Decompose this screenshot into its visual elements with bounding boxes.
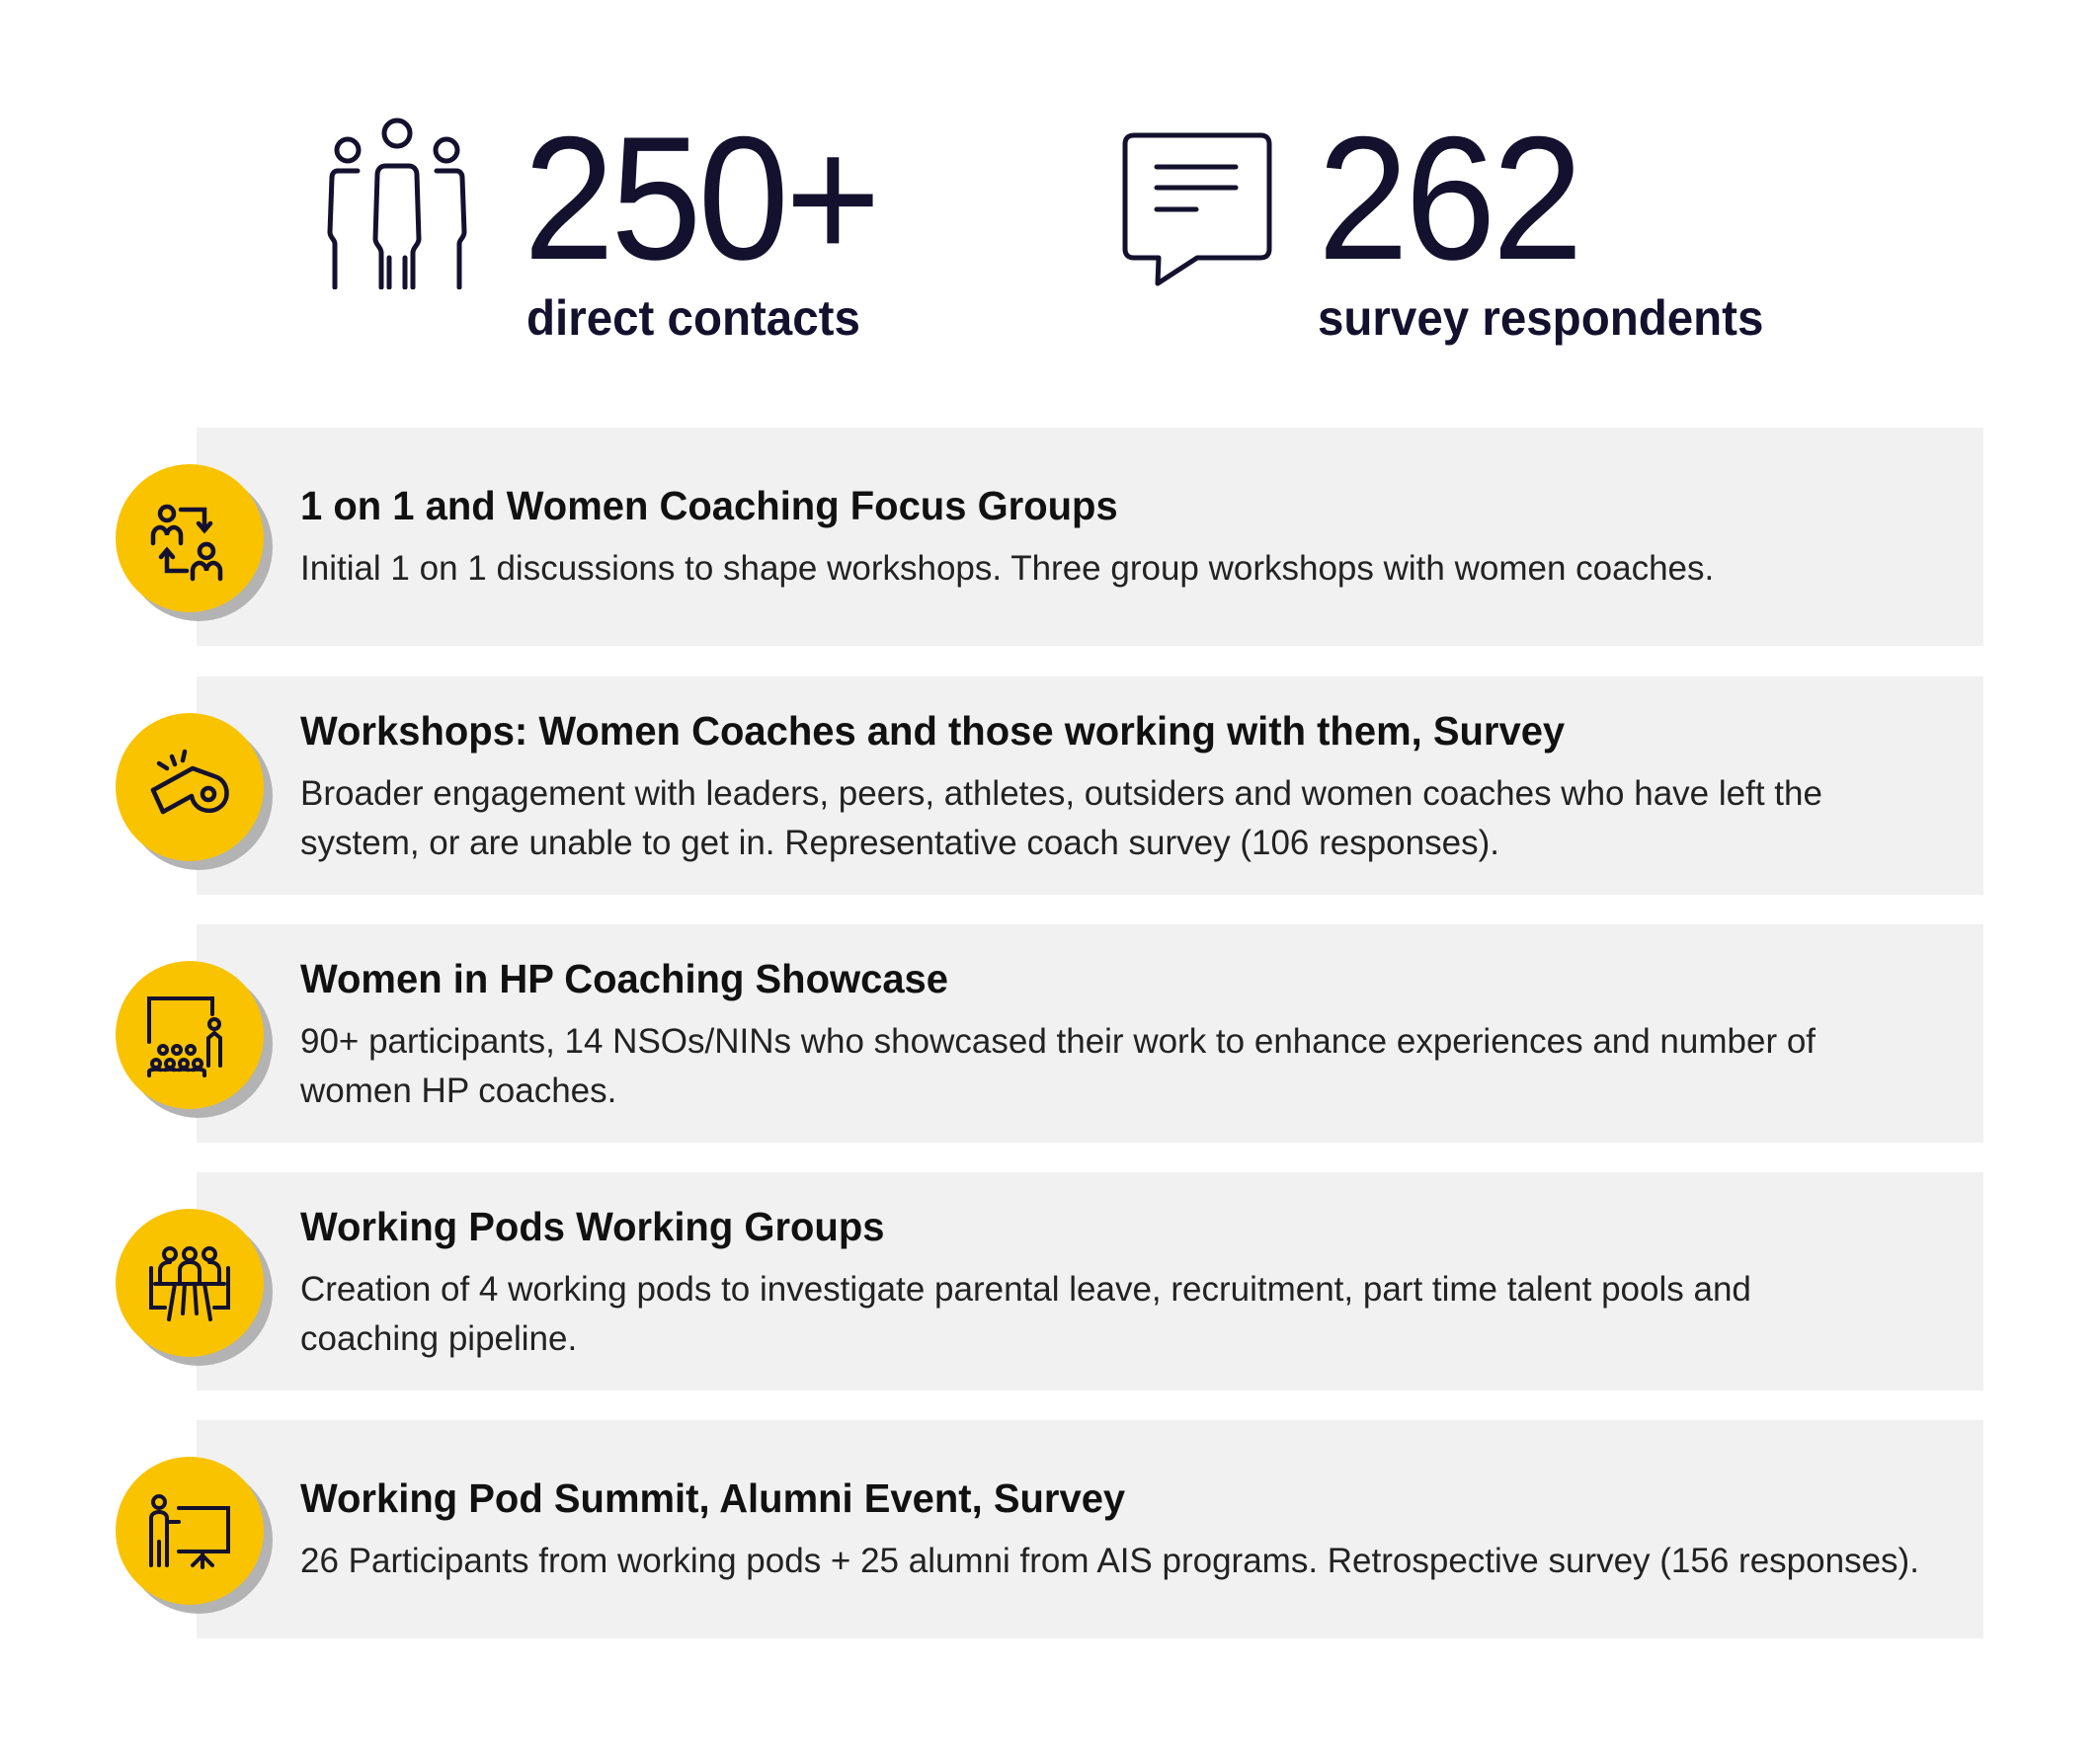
stat: 262: 262 xyxy=(1318,100,1579,296)
stat: 250+: 250+ xyxy=(524,100,877,296)
text xyxy=(300,774,1822,862)
icon: people xyxy=(328,119,466,289)
heading: Working Pods Working Groups xyxy=(300,1204,885,1249)
icon: presentation audience xyxy=(116,961,273,1118)
panel: workshops xyxy=(197,676,1983,895)
heading: Women in HP Coaching Showcase xyxy=(300,956,948,1001)
text: coaching pipeline. xyxy=(300,1319,577,1358)
heading: Working Pod Summit, Alumni Event, Survey xyxy=(300,1475,1125,1521)
panel: showcase xyxy=(197,924,1983,1143)
text: 90+ participants, 14 NSOs/NINs who showcased their work to enhance experiences and number of xyxy=(300,1022,1816,1061)
text xyxy=(300,1270,1751,1358)
icon: 1 on 1 exchange xyxy=(116,464,273,621)
heading: Workshops: Women Coaches and those working with them, Survey xyxy=(300,708,1565,754)
panel: summit xyxy=(197,1420,1983,1638)
label: survey respondents: survey respondents xyxy=(1318,290,1763,346)
icon: whistle xyxy=(116,713,273,870)
text: Creation of 4 working pods to investigate parental leave, recruitment, part time talent pools and xyxy=(300,1270,1751,1309)
text: women HP coaches. xyxy=(300,1072,616,1110)
panel: focus groups xyxy=(197,428,1983,646)
label: direct contacts: direct contacts xyxy=(526,290,860,346)
text: system, or are unable to get in. Representative coach survey (106 responses). xyxy=(300,824,1499,862)
text xyxy=(300,1022,1816,1110)
text: Broader engagement with leaders, peers, athletes, outsiders and women coaches who have left the xyxy=(300,774,1822,813)
panel: working pods xyxy=(197,1172,1983,1391)
text: 26 Participants from working pods + 25 alumni from AIS programs. Retrospective survey (156 responses). xyxy=(300,1542,1919,1580)
text: Initial 1 on 1 discussions to shape workshops. Three group workshops with women coaches. xyxy=(300,549,1714,588)
heading: 1 on 1 and Women Coaching Focus Groups xyxy=(300,483,1118,528)
icon: presenter board xyxy=(116,1457,273,1614)
icon: speech bubble xyxy=(1122,132,1272,286)
icon: meeting table xyxy=(116,1209,273,1366)
